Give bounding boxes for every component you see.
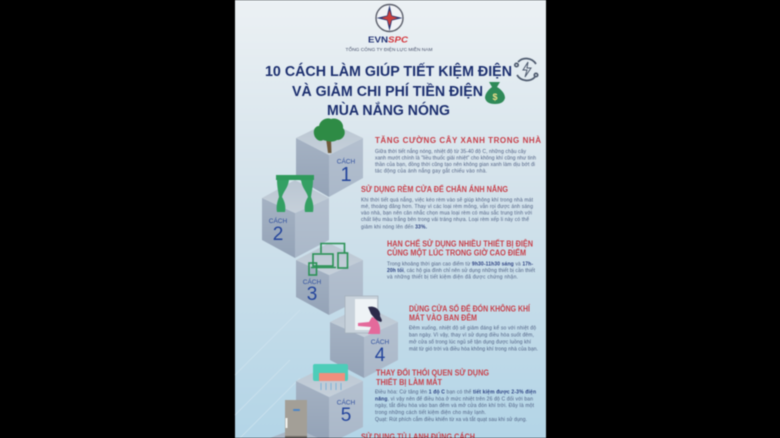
step 1 text: tác động của ánh nắng gay gắt chiếu vào nhà. [375, 168, 487, 174]
step 5 cube [296, 364, 363, 438]
step 4 text: mát từ gió trời và điều hòa không khí trong nhà của bạn. [409, 346, 538, 352]
icon: tree [314, 118, 345, 153]
step 5 cube: 5 [341, 405, 351, 426]
step 3 text: HẠN CHẾ SỬ DỤNG NHIỀU THIẾT BỊ ĐIỆN [387, 238, 533, 248]
step 2 cube [262, 175, 329, 258]
step 4 text [409, 304, 538, 352]
step 2 text: SỬ DỤNG RÈM CỬA ĐỂ CHẮN ÁNH NẮNG [361, 185, 508, 194]
step 3 text: và những thiết bị tiết kiệm điện đã được chứng nhận. [387, 274, 518, 280]
title: MÙA NẮNG NÓNG [327, 101, 450, 119]
logo: EVNSPC: EVN SPC [368, 34, 409, 44]
step 4 text: DÙNG CỬA SỔ ĐỂ ĐÓN KHÔNG KHÍ [409, 304, 531, 314]
icon: energy saving [515, 59, 538, 80]
icon: curtains [276, 175, 314, 212]
step 6 cube [270, 400, 318, 438]
step 1 text [375, 136, 541, 174]
icon: woman at window [345, 296, 382, 334]
step 5 text [375, 368, 536, 423]
step 5 text: ngày, tắt điều hòa vào ban đêm và mở cửa đón khí trời. Đây là một [375, 402, 535, 409]
step 5 text: Quạt: Rút phích cắm điều khiển từ xa và tắt quạt sau khi sử dụng. [375, 416, 527, 423]
step 2 text: mẻ, thoáng đãng hơn. Thay vì các loại rèm mỏng, vẫn rọi được ánh sáng [361, 203, 533, 210]
step 4 cube: 4 [375, 345, 386, 366]
step 2 text: vào nhà, bạn nên cân nhắc chọn mua loại rèm có màu sắc trung tính với [361, 210, 532, 216]
step 4 cube [330, 296, 398, 378]
title: 10 CÁCH LÀM GIÚP TIẾT KIỆM ĐIỆN [265, 62, 512, 80]
step 1 cube: 1 [340, 164, 352, 186]
step 1 text: thần của bạn, đồng thời cũng tạo nên không gian xanh làm dịu bớt đi [375, 161, 535, 168]
step 5 text: Điều hòa: Cứ tăng lên 1 độ C bạn có thể tiết kiệm được 2-3% điện [375, 388, 536, 396]
step 1 cube [296, 118, 363, 197]
icon: money bag [485, 82, 505, 104]
title: VÀ GIẢM CHI PHÍ TIỀN ĐIỆN [292, 82, 483, 100]
step 3 text: 20h tối, các hộ gia đình chỉ nên sử dụng những thiết bị cần thiết [387, 267, 536, 274]
logo: EVNSPC [346, 4, 433, 52]
step 2 text: Khi thời tiết quá nắng, việc kéo rèm vào sẽ giúp không khí trong nhà mát [361, 196, 534, 204]
step 2 cube: CÁCH [269, 216, 288, 225]
step 4 text: Đêm xuống, nhiệt độ sẽ giảm đáng kể so với nhiệt độ [409, 324, 536, 332]
step 5 cube: CÁCH [337, 398, 356, 406]
step 1 text: Giữa thời tiết nắng nóng, nhiệt độ từ 35-40 độ C, những chậu cây [375, 148, 526, 155]
step 2 text [361, 185, 534, 230]
background panel [235, 0, 546, 438]
step 3 text [387, 238, 536, 280]
icon: refrigerator [285, 400, 307, 438]
step 3 cube [296, 243, 363, 315]
step 5 text: THIẾT BỊ LÀM MÁT [376, 377, 442, 387]
step 5 text: THAY ĐỔI THÓI QUEN SỬ DỤNG [376, 368, 489, 378]
step 1 text: xanh mướt chính là "liều thuốc giải nhiệt" cho không khí cũng như tinh [375, 156, 536, 162]
step 3 text: CÙNG MỘT LÚC TRONG GIỜ CAO ĐIỂM [387, 248, 526, 258]
step 2 text: giảm khi nóng lên đến 33%. [361, 224, 428, 230]
step 5 text: trong những cách tiết kiệm điện cho máy lạnh. [375, 410, 486, 416]
step 2 text: chất liệu màu trắng bên trong vải tráng nhựa. Loại rèm xếp li này có thể [361, 216, 529, 223]
logo: EVNSPC: TỔNG CÔNG TY ĐIỆN LỰC MIỀN NAM [346, 47, 433, 52]
icon: air conditioner [313, 364, 348, 390]
step 2 cube: 2 [273, 224, 283, 245]
step 4 text: ban ngày. Vì vậy, thay vì sử dụng điều hòa suốt đêm, [409, 332, 534, 338]
step 4 text: MÁT VÀO BAN ĐÊM [409, 314, 477, 322]
step 4 text: mở cửa sổ trong lúc ngủ sẽ tận dụng được luồng khí [409, 338, 532, 346]
icon: money bag: $ [492, 92, 498, 102]
step 3 text: Trong khoảng thời gian cao điểm từ 9h30-11h30 sáng và 17h- [387, 260, 533, 268]
step 1 cube: CÁCH [337, 156, 356, 166]
step 4 cube: CÁCH [371, 337, 390, 346]
step 3 cube: CÁCH [303, 277, 322, 286]
step 3 cube: 3 [307, 284, 317, 305]
icon: devices [309, 244, 348, 275]
title [265, 62, 512, 119]
step 5 text: năng, vì vậy nên để điều hòa ở mức nhiệt trên 26 độ C đối với ban [375, 396, 533, 402]
step 1 text: TĂNG CƯỜNG CÂY XANH TRONG NHÀ [375, 136, 541, 145]
